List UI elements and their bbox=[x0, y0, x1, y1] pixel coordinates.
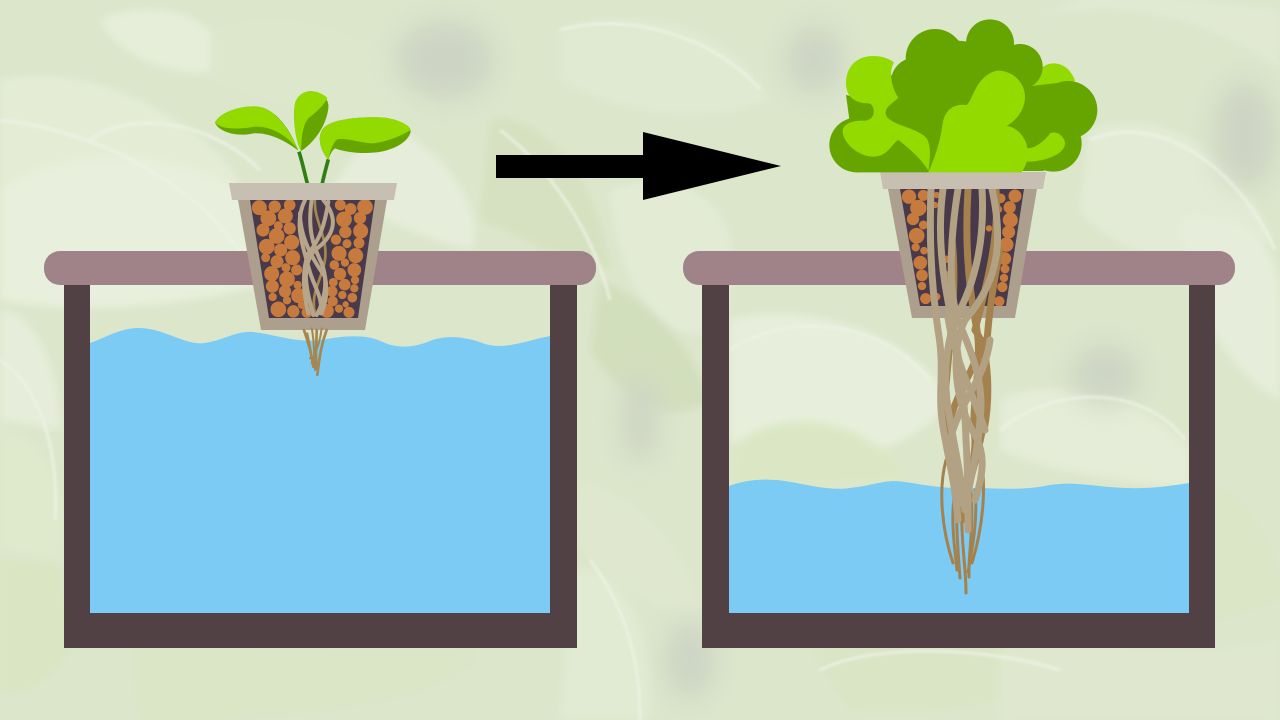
roots: short seedling roots bbox=[300, 200, 333, 375]
water: right tank, low level bbox=[729, 480, 1189, 613]
growing medium: left pot bbox=[250, 200, 375, 318]
clay pellets: left pot bbox=[252, 200, 372, 317]
pot rim: left bbox=[229, 183, 397, 200]
pot: left net pot body bbox=[238, 200, 387, 330]
tank: right reservoir bbox=[683, 251, 1235, 648]
lettuce: mature plant in net pot bbox=[829, 19, 1097, 593]
clay pellets: right pot bbox=[902, 190, 1021, 306]
rim: right tank bbox=[683, 251, 1235, 285]
growing medium: right pot bbox=[900, 189, 1024, 306]
roots: long mature roots bbox=[930, 189, 1000, 593]
seedling: small plant in net pot bbox=[215, 91, 411, 375]
frame: left tank walls bbox=[64, 285, 577, 648]
arrow: growth over time bbox=[496, 132, 781, 200]
tank: left reservoir bbox=[44, 251, 596, 648]
frame: right tank walls bbox=[702, 285, 1215, 648]
pot: right net pot body bbox=[888, 189, 1037, 318]
water: left tank, high level bbox=[90, 328, 550, 613]
rim: left tank bbox=[44, 251, 596, 285]
pot rim: right bbox=[880, 172, 1046, 189]
icon: seedling leaves bbox=[215, 91, 411, 183]
icon: lettuce leaves bbox=[829, 19, 1097, 172]
